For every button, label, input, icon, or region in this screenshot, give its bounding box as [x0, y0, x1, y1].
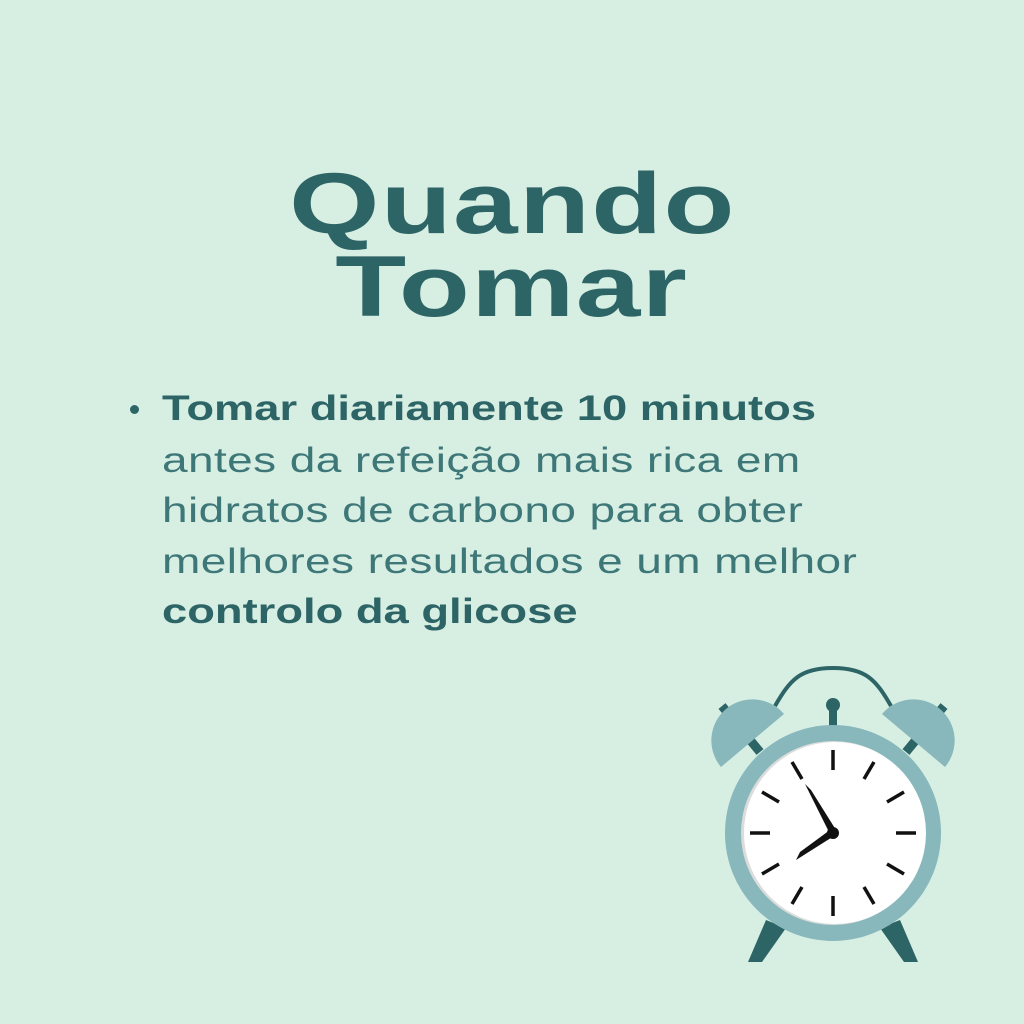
bullet dot [130, 405, 139, 414]
legs [748, 920, 786, 962]
bullet text block: melhores resultados e um melhor [162, 542, 857, 581]
case [725, 725, 941, 941]
handle [775, 668, 891, 706]
bullet text block: antes da refeição mais rica em [162, 441, 801, 480]
title: Tomar [336, 239, 688, 335]
bells [711, 699, 784, 767]
top knob [829, 702, 837, 728]
hands [805, 784, 836, 834]
bullet text block: hidratos de carbono para obter [162, 491, 803, 530]
title: Quando [289, 156, 735, 252]
bullet text block: Tomar diariamente 10 minutos [162, 389, 816, 428]
icon: alarm clock [711, 666, 955, 962]
bullet text block: controlo da glicose [162, 592, 578, 631]
bullet text block [130, 389, 857, 631]
bell pins [722, 706, 760, 752]
title [289, 156, 735, 335]
